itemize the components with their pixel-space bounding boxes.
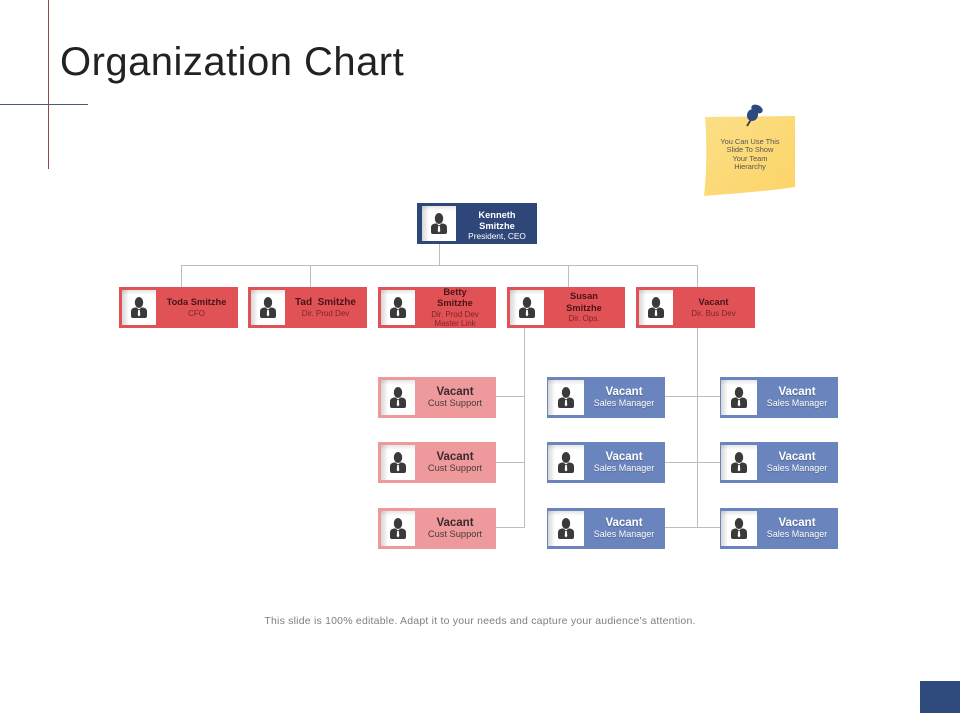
card: Vacant Sales Manager right 1: Vacant [778, 386, 816, 398]
card: Vacant Sales Manager left 3: Vacant [605, 517, 643, 529]
card: Vacant Sales Manager left 3: Sales Manager [594, 529, 654, 539]
card: Toda Smitzhe: CFO [188, 308, 205, 318]
card: Kenneth Smitzhe: President, CEO [468, 230, 526, 240]
footer caption: This slide is 100% editable. Adapt it to your needs and capture your audience's attention. [264, 615, 696, 627]
card: Vacant Sales Manager right 3: Vacant [778, 517, 816, 529]
corner page block [920, 681, 960, 713]
card: Vacant Sales Manager right 2: Vacant [778, 451, 816, 463]
note text: Slide To Show [727, 145, 773, 154]
card: Vacant Sales Manager left 1: Vacant [605, 386, 643, 398]
title: Organization Chart [60, 40, 404, 84]
card: Kenneth Smitzhe: Kenneth [478, 210, 516, 220]
card: Vacant Cust Support 1: Cust Support [428, 398, 482, 408]
card: Susan Smitzhe: Dir. Ops. [568, 314, 600, 323]
card: Susan Smitzhe: Smitzhe [566, 303, 602, 313]
card: Vacant Sales Manager left 1: Sales Manager [594, 398, 654, 408]
card: Tad Smitzhe: Dir. Prod Dev [302, 308, 349, 318]
card: Vacant Sales Manager left 3 [547, 508, 665, 549]
card: Tad Smitzhe: Tad Smitzhe [295, 297, 356, 308]
card: Vacant Sales Manager right 1: Sales Manager [767, 398, 827, 408]
card: Vacant Sales Manager left 1 [547, 377, 665, 418]
card: Vacant Dir. Bus Dev [636, 287, 755, 328]
card: Vacant Sales Manager right 2: Sales Manager [767, 463, 827, 473]
icon: push pin [746, 104, 763, 126]
card: Vacant Cust Support 2: Vacant [436, 451, 474, 463]
card: Vacant Dir. Bus Dev: Vacant [698, 297, 728, 307]
decorative crosshair vertical line [48, 0, 49, 169]
card: Vacant Cust Support 2: Cust Support [428, 463, 482, 473]
card: Kenneth Smitzhe [417, 203, 537, 244]
card: Vacant Cust Support 3: Cust Support [428, 529, 482, 539]
decorative crosshair horizontal line [0, 104, 88, 105]
note text: You Can Use This [720, 137, 780, 146]
card: Susan Smitzhe [507, 287, 625, 328]
card: Vacant Sales Manager right 3: Sales Manager [767, 529, 827, 539]
card: Vacant Sales Manager left 2: Vacant [605, 451, 643, 463]
card: Vacant Sales Manager right 3 [720, 508, 838, 549]
card: Tad Smitzhe [248, 287, 367, 328]
card: Betty Smitzhe: Smitzhe [437, 298, 473, 308]
sticky note with pin [704, 104, 795, 196]
card: Vacant Cust Support 1 [378, 377, 496, 418]
card: Vacant Cust Support 1: Vacant [436, 386, 474, 398]
card: Toda Smitzhe [119, 287, 238, 328]
card: Kenneth Smitzhe: Smitzhe [479, 220, 515, 230]
card: Betty Smitzhe: Betty [443, 286, 467, 296]
card: Vacant Cust Support 3 [378, 508, 496, 549]
note paper [704, 116, 795, 196]
card: Betty Smitzhe: Master Link [434, 319, 476, 328]
note text: Hierarchy [734, 162, 766, 171]
note text [720, 137, 780, 171]
card: Betty Smitzhe [378, 287, 496, 328]
card: Vacant Sales Manager left 2 [547, 442, 665, 483]
card: Betty Smitzhe: Dir. Prod Dev [431, 310, 479, 318]
card: Vacant Sales Manager left 2: Sales Manager [594, 463, 654, 473]
card: Susan Smitzhe: Susan [570, 291, 598, 301]
card: Vacant Dir. Bus Dev: Dir. Bus Dev [691, 308, 736, 318]
card: Vacant Sales Manager right 1 [720, 377, 838, 418]
card: Toda Smitzhe: Toda Smitzhe [167, 297, 226, 307]
card: Vacant Sales Manager right 2 [720, 442, 838, 483]
card: Vacant Cust Support 3: Vacant [436, 517, 474, 529]
note text: Your Team [733, 154, 767, 163]
card: Vacant Cust Support 2 [378, 442, 496, 483]
